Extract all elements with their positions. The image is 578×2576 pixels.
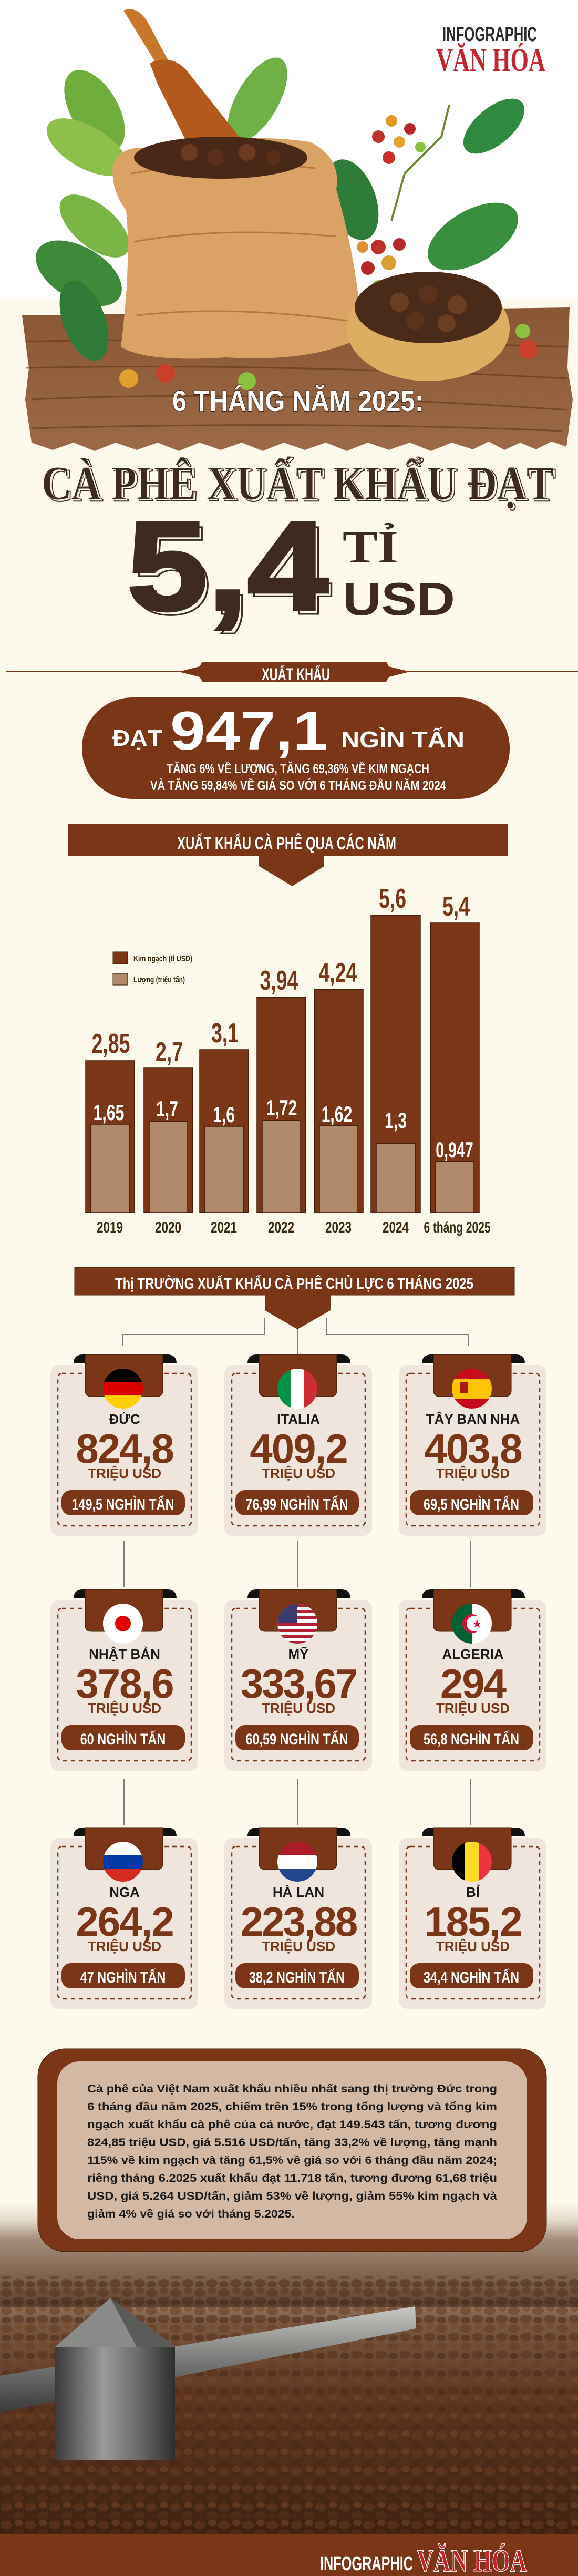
text block: summary — [38, 2049, 546, 2252]
card: Algeria: 294 — [440, 1660, 507, 1707]
bar chart: 2019 — [97, 1218, 123, 1236]
card: My: 60,59 NGHÌN TẤN — [246, 1730, 348, 1748]
text block: summary: riêng tháng 6.2025 xuất khẩu đạt 11.718 tấn, tương đương 61,68 triệu — [87, 2172, 497, 2184]
card: Nhat Ban — [50, 1589, 198, 1771]
bar chart: 1,72 — [266, 1095, 297, 1120]
card: Duc: 824,8 — [76, 1425, 173, 1472]
footer bar with logo — [0, 2534, 578, 2576]
chart header: xuat khau ca phe qua cac nam — [68, 824, 508, 886]
card: Italia: 76,99 NGHÌN TẤN — [246, 1495, 348, 1513]
card: Italia: 409,2 — [250, 1425, 347, 1472]
headline number 5,4 ti USD: USD — [343, 573, 455, 625]
bar chart: 2,7 — [156, 1036, 183, 1067]
text block: summary: USD, giá 5.264 USD/tấn, giảm 53% về lượng, giảm 55% kim ngạch và — [87, 2190, 497, 2202]
pill: 947,1 nghin tan: 947,1 — [170, 701, 328, 762]
bar chart: 2,85 — [92, 1028, 130, 1059]
card: Nga: NGA — [109, 1884, 140, 1900]
card: Bi: BỈ — [466, 1884, 480, 1900]
card: Ha Lan: 38,2 NGHÌN TẤN — [249, 1968, 345, 1986]
card: Bi: TRIỆU USD — [436, 1938, 510, 1954]
markets header: Thị TRƯỜNG XUẤT KHẨU CÀ PHÊ CHỦ LỰC 6 THÁNG 2025 — [115, 1275, 473, 1292]
chart header: xuat khau ca phe qua cac nam: XUẤT KHẨU CÀ PHÊ QUA CÁC NĂM — [177, 834, 396, 854]
card: Algeria: 56,8 NGHÌN TẤN — [424, 1730, 519, 1748]
card: Ha Lan — [224, 1828, 372, 2009]
card: Duc: ĐỨC — [109, 1411, 140, 1427]
bar chart: 0,947 — [436, 1137, 473, 1162]
bar chart: 1,6 — [213, 1102, 235, 1127]
card: My: TRIỆU USD — [262, 1700, 335, 1716]
bar chart: 2023 — [325, 1218, 352, 1236]
pill: 947,1 nghin tan: ĐẠT — [112, 725, 162, 751]
card: Italia — [224, 1354, 372, 1536]
card: Nhat Ban: 378,6 — [76, 1660, 173, 1707]
headline number 5,4 ti USD: 5,4 — [131, 500, 332, 641]
subtitle: 6 thang nam 2025: 6 THÁNG NĂM 2025: — [172, 384, 424, 417]
pill: 947,1 nghin tan: VÀ TĂNG 59,84% VỀ GIÁ SO VỚI 6 THÁNG ĐẦU NĂM 2024 — [150, 777, 446, 793]
bar chart: 5,4 — [442, 891, 470, 921]
legend: Kim ngạch (tỉ USD) — [133, 955, 192, 963]
photo: coffee beans with roaster rod — [0, 2202, 578, 2539]
card: Ha Lan: 223,88 — [241, 1898, 357, 1945]
card: Duc — [50, 1354, 198, 1536]
card: Nga — [50, 1828, 198, 2009]
card: My: MỸ — [288, 1646, 309, 1662]
bar chart: 1,65 — [94, 1100, 124, 1125]
card: Nga: 264,2 — [76, 1898, 173, 1945]
card: Bi: 185,2 — [424, 1898, 522, 1945]
card: Tay Ban Nha: TRIỆU USD — [436, 1465, 510, 1481]
bar chart: 5,6 — [379, 883, 406, 914]
headline number 5,4 ti USD — [127, 496, 455, 641]
card: Tay Ban Nha: TÂY BAN NHA — [426, 1411, 520, 1427]
pill: 947,1 nghin tan: TĂNG 6% VỀ LƯỢNG, TĂNG 69,36% VỀ KIM NGẠCH — [167, 761, 429, 776]
card: Nga: 47 NGHÌN TẤN — [80, 1968, 166, 1986]
bar chart — [86, 883, 491, 1236]
card: Algeria: ALGERIA — [442, 1646, 504, 1662]
bar chart: 2024 — [383, 1218, 409, 1236]
card: Algeria — [399, 1589, 546, 1771]
bar chart: 1,7 — [156, 1096, 178, 1121]
legend — [113, 952, 192, 985]
bar chart: 3,94 — [260, 965, 298, 995]
card: Italia: ITALIA — [277, 1411, 320, 1427]
card: Tay Ban Nha: 69,5 NGHÌN TẤN — [424, 1495, 519, 1513]
bar chart: 2020 — [155, 1218, 181, 1236]
legend: Lượng (triệu tấn) — [133, 976, 185, 984]
bar chart: 1,3 — [385, 1108, 407, 1133]
bar chart: 2022 — [268, 1218, 294, 1236]
card: Bi: 34,4 NGHÌN TẤN — [424, 1968, 519, 1986]
card: Algeria: TRIỆU USD — [436, 1700, 510, 1716]
markets header — [75, 1267, 514, 1329]
pill: 947,1 nghin tan — [82, 697, 510, 799]
bar chart: 6 tháng 2025 — [424, 1219, 491, 1236]
headline number 5,4 ti USD: 5,4 — [127, 496, 328, 637]
text block: summary: 115% về kim ngạch và tăng 61,5% về giá so với 6 tháng đầu năm 2024; — [87, 2154, 497, 2167]
banner: xuat khau: XUẤT KHẨU — [262, 665, 330, 684]
card: Nhat Ban: TRIỆU USD — [88, 1700, 161, 1716]
text block: summary: 824,85 triệu USD, giá 5.516 USD/tấn, tăng 33,2% về lượng, tăng mạnh — [87, 2137, 497, 2149]
card: Nga: TRIỆU USD — [88, 1938, 161, 1954]
header illustration: coffee sack on wooden plank — [22, 9, 573, 451]
card: Nhat Ban: 60 NGHÌN TẤN — [80, 1730, 166, 1748]
card: Ha Lan: HÀ LAN — [273, 1884, 324, 1900]
text block: summary: giảm 4% về giá so với tháng 5.2025. — [87, 2208, 295, 2220]
text block: summary: Cà phê của Việt Nam xuất khẩu nhiều nhất sang thị trường Đức trong — [87, 2083, 497, 2095]
card: Tay Ban Nha — [399, 1354, 546, 1536]
card: Italia: TRIỆU USD — [262, 1465, 335, 1481]
text block: summary: 6 tháng đầu năm 2025, chiếm trên 15% trong tổng lượng và tổng kim — [87, 2101, 497, 2113]
banner: xuat khau — [6, 662, 578, 684]
card: Ha Lan: TRIỆU USD — [262, 1938, 335, 1954]
logo: infographic van hoa — [436, 24, 545, 78]
bar chart: 2021 — [211, 1218, 237, 1236]
card: Nhat Ban: NHẬT BẢN — [89, 1646, 160, 1662]
card: Bi — [399, 1828, 546, 2009]
text block: summary: ngạch xuất khẩu cà phê của cả nước, đạt 149.543 tấn, tương đương — [87, 2119, 497, 2131]
bar chart: 3,1 — [211, 1018, 239, 1048]
pill: 947,1 nghin tan: NGÌN TẤN — [341, 726, 465, 753]
card: My — [224, 1589, 372, 1771]
card: My: 333,67 — [241, 1660, 356, 1707]
bar chart: 1,62 — [322, 1102, 352, 1126]
card: Duc: 149,5 NGHÌN TẤN — [72, 1495, 174, 1513]
card: Tay Ban Nha: 403,8 — [424, 1425, 522, 1472]
bar chart: 4,24 — [319, 957, 357, 988]
footer bar with logo: INFOGRAPHIC — [320, 2553, 413, 2575]
card: Duc: TRIỆU USD — [88, 1465, 161, 1481]
headline number 5,4 ti USD: TỈ — [343, 522, 398, 573]
